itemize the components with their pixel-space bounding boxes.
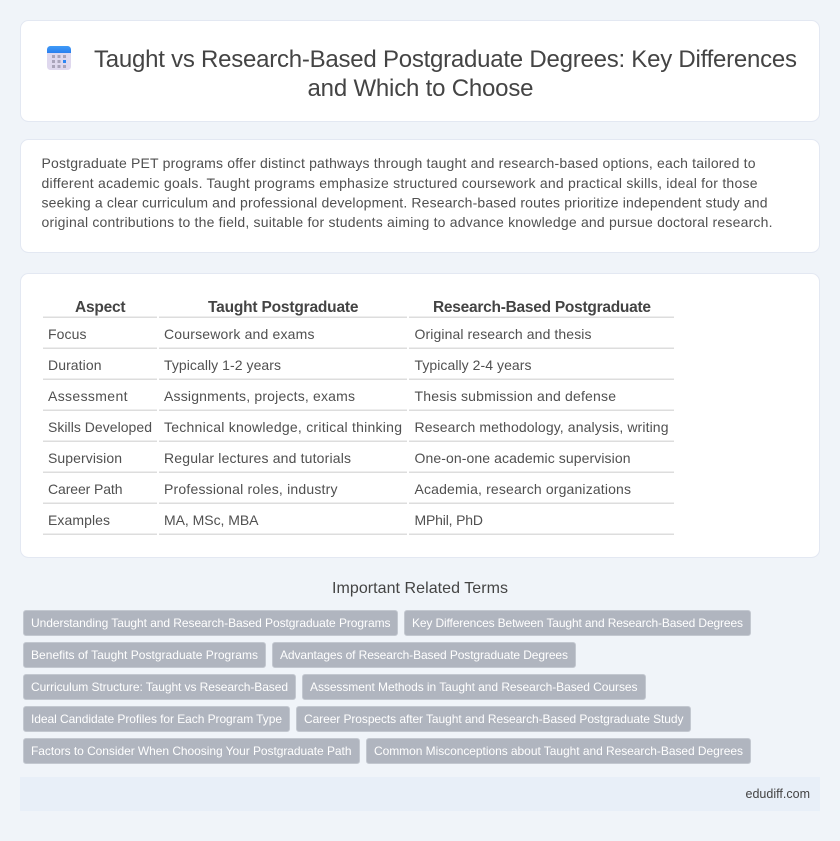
row: focus: Focus bbox=[48, 326, 86, 342]
tag: Understanding Taught and Research-Based Postgraduate Programs bbox=[31, 616, 390, 630]
row: skills developed: Skills Developed bbox=[48, 419, 152, 435]
row: examples: Examples bbox=[48, 512, 110, 528]
row: skills developed: Technical knowledge, critical thinking bbox=[164, 419, 402, 435]
row: examples: MA, MSc, MBA bbox=[164, 512, 259, 528]
tag bbox=[24, 738, 360, 764]
tag bbox=[404, 610, 750, 636]
tag bbox=[272, 642, 576, 668]
panel: title header bbox=[20, 20, 820, 122]
table header: Taught Postgraduate bbox=[208, 299, 359, 316]
tag: Career Prospects after Taught and Research-Based Postgraduate Study bbox=[304, 712, 684, 726]
row: assessment: Assessment bbox=[48, 388, 128, 404]
tag bbox=[366, 738, 750, 764]
row: assessment bbox=[48, 388, 616, 404]
tag: Factors to Consider When Choosing Your Postgraduate Path bbox=[31, 744, 352, 758]
table header: Aspect bbox=[75, 299, 126, 316]
table header bbox=[75, 299, 651, 316]
tag: Ideal Candidate Profiles for Each Program Type bbox=[31, 712, 282, 726]
tag: Common Misconceptions about Taught and Research-Based Degrees bbox=[374, 744, 743, 758]
tag: Benefits of Taught Postgraduate Programs bbox=[31, 648, 258, 662]
row: supervision bbox=[48, 450, 630, 466]
row: duration: Duration bbox=[48, 357, 102, 373]
tag: Advantages of Research-Based Postgraduate Degrees bbox=[280, 648, 568, 662]
tag: Key Differences Between Taught and Research-Based Degrees bbox=[412, 616, 743, 630]
row: career path: Professional roles, industry bbox=[164, 481, 338, 497]
table header: Research-Based Postgraduate bbox=[433, 299, 651, 316]
intro paragraph: Postgraduate PET programs offer distinct pathways through taught and research-based options, each tailored to bbox=[42, 155, 756, 171]
tag bbox=[24, 674, 296, 700]
row: supervision: Regular lectures and tutorials bbox=[164, 450, 351, 466]
panel: introduction bbox=[20, 140, 820, 252]
row: focus bbox=[48, 326, 592, 342]
row: examples: MPhil, PhD bbox=[414, 512, 483, 528]
row: career path bbox=[48, 481, 631, 497]
row: career path: Career Path bbox=[48, 481, 122, 497]
tag: Assessment Methods in Taught and Research-Based Courses bbox=[310, 680, 638, 694]
title: and Which to Choose bbox=[308, 75, 534, 102]
heading: important related terms: Important Related Terms bbox=[332, 580, 508, 597]
tag bbox=[24, 706, 290, 732]
intro paragraph: seeking a clear curriculum and professional development. Research-based routes prioritize independent study and bbox=[42, 194, 768, 210]
row: examples bbox=[48, 512, 483, 528]
row: duration bbox=[48, 357, 532, 373]
row: supervision: Supervision bbox=[48, 450, 122, 466]
title bbox=[94, 46, 797, 102]
row: skills developed: Research methodology, analysis, writing bbox=[414, 419, 668, 435]
row: duration: Typically 1-2 years bbox=[164, 357, 281, 373]
row: supervision: One-on-one academic supervision bbox=[414, 450, 630, 466]
footer bbox=[20, 777, 820, 811]
related terms tags bbox=[24, 610, 750, 764]
tag bbox=[296, 706, 690, 732]
row: assessment: Thesis submission and defense bbox=[414, 388, 616, 404]
row: assessment: Assignments, projects, exams bbox=[164, 388, 355, 404]
row: focus: Original research and thesis bbox=[414, 326, 592, 342]
tag bbox=[24, 642, 266, 668]
intro paragraph: original contributions to the field, suitable for students aiming to advance knowledge and pursue doctoral research. bbox=[42, 214, 772, 230]
row: focus: Coursework and exams bbox=[164, 326, 314, 342]
panel: comparison table bbox=[20, 274, 820, 558]
tag bbox=[302, 674, 646, 700]
footer: edudiff.com bbox=[746, 787, 810, 801]
row: duration: Typically 2-4 years bbox=[414, 357, 532, 373]
row: career path: Academia, research organizations bbox=[414, 481, 631, 497]
title: Taught vs Research-Based Postgraduate Degrees: Key Differences bbox=[94, 46, 797, 73]
tag: Curriculum Structure: Taught vs Research-Based bbox=[31, 680, 288, 694]
icon: calendar bbox=[47, 46, 71, 70]
tag bbox=[24, 610, 398, 636]
intro paragraph bbox=[42, 155, 772, 230]
row: skills developed bbox=[48, 419, 668, 435]
intro paragraph: different academic goals. Taught programs emphasize structured coursework and practical skills, ideal for those bbox=[42, 175, 758, 191]
